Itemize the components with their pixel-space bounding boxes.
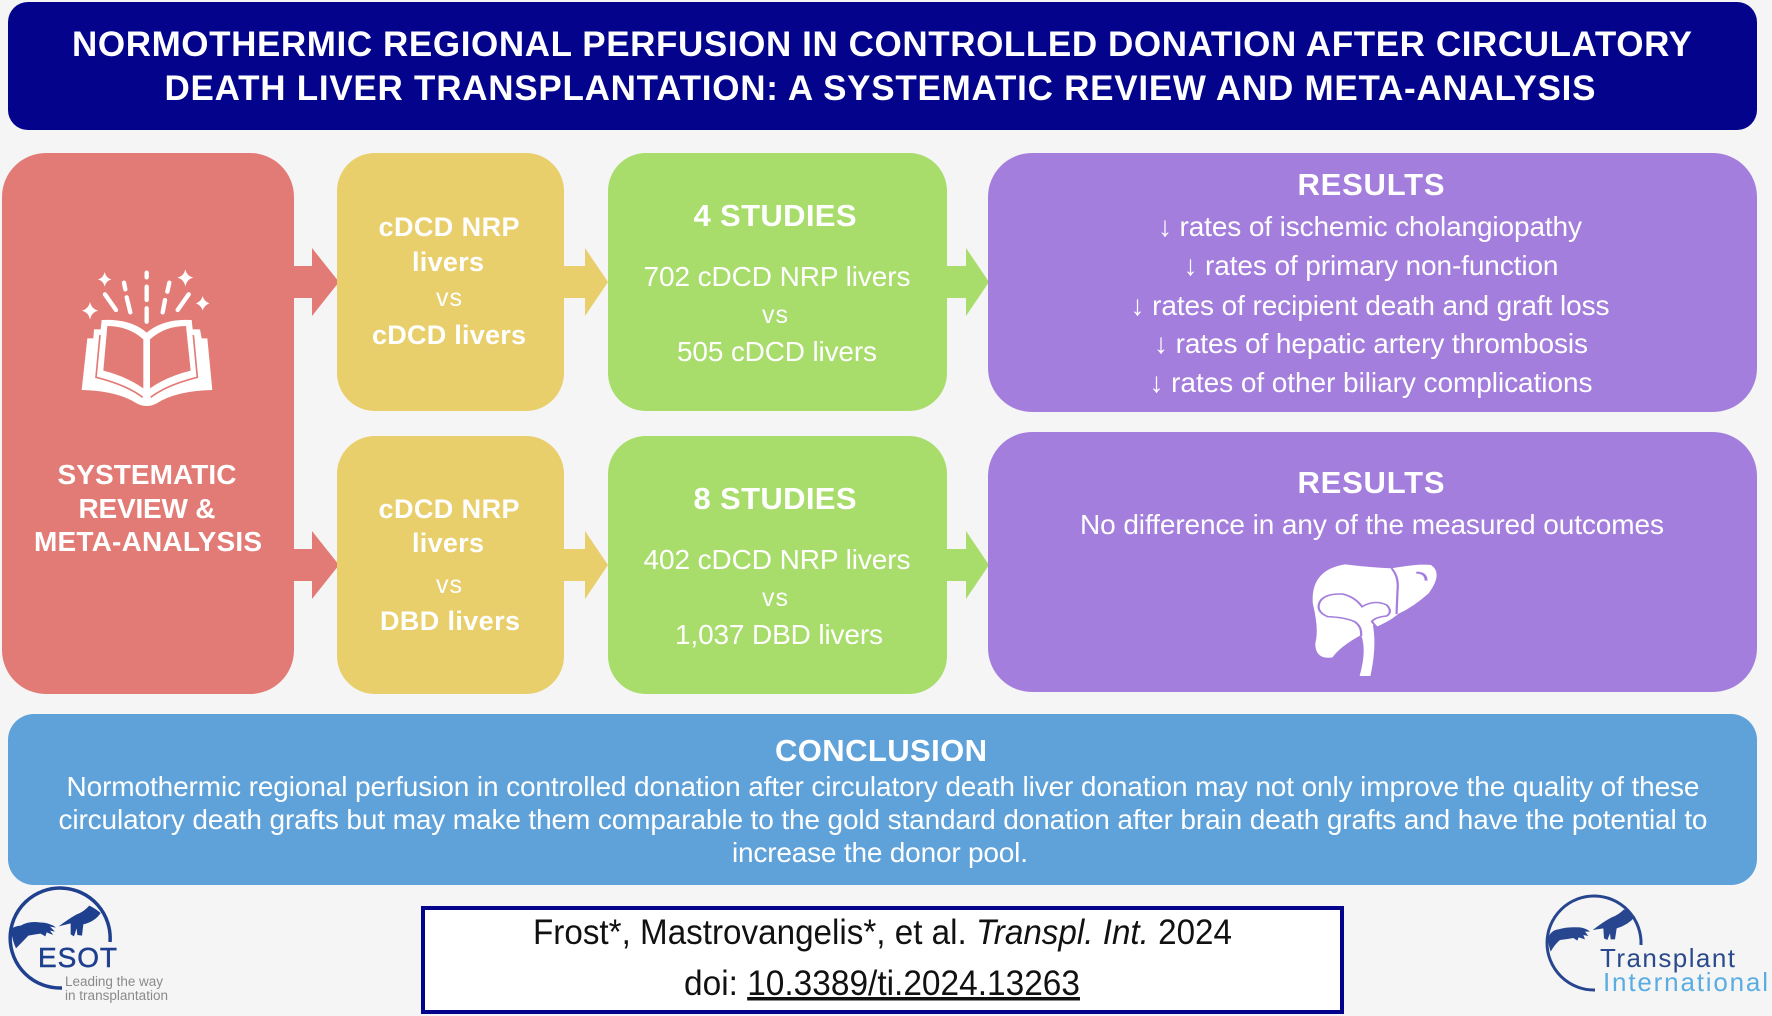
logo: Transplant International: Transplant xyxy=(1600,943,1736,973)
panel: cDCD NRP vs DBD comparison: cDCD NRP xyxy=(378,494,520,524)
title banner: DEATH LIVER TRANSPLANTATION: A SYSTEMATIC REVIEW AND META-ANALYSIS xyxy=(164,69,1596,108)
arrow: review to bottom comparison xyxy=(294,531,339,599)
arrow: bottom comparison to studies xyxy=(564,531,608,599)
panel: cDCD NRP vs cDCD comparison: vs xyxy=(436,284,462,312)
panel heading: systematic review: SYSTEMATIC xyxy=(58,459,236,490)
panel: 4 studies xyxy=(608,153,947,411)
panel heading: systematic review: REVIEW & xyxy=(78,493,216,524)
panel: results for NRP vs DBD: RESULTS xyxy=(1298,465,1444,500)
panel: results for NRP vs DBD: No difference in any of the measured outcomes xyxy=(1080,509,1664,540)
icon: open book with sparkles xyxy=(82,269,212,406)
panel: results for NRP vs cDCD xyxy=(988,153,1757,412)
panel: conclusion: circulatory death grafts but may make them comparable to the gold standard donation after brain death grafts and have the potential to xyxy=(58,804,1708,835)
panel: 4 studies: 4 STUDIES xyxy=(694,198,856,233)
panel: cDCD NRP vs DBD comparison: vs xyxy=(436,571,462,599)
panel: 4 studies: 505 cDCD livers xyxy=(677,336,877,367)
panel: systematic review and meta-analysis xyxy=(2,153,294,694)
citation box: Frost*, Mastrovangelis*, et al. Transpl. Int. 2024 xyxy=(533,913,1232,952)
title banner xyxy=(8,2,1757,130)
logo: Transplant International: International xyxy=(1603,967,1768,997)
logo: ESOT: ESOT xyxy=(38,942,117,973)
panel: 8 studies: 8 STUDIES xyxy=(694,481,856,516)
panel: 4 studies: vs xyxy=(762,301,788,329)
panel: 8 studies: 402 cDCD NRP livers xyxy=(644,544,910,575)
panel: cDCD NRP vs cDCD comparison: cDCD livers xyxy=(372,320,526,350)
panel: conclusion xyxy=(8,714,1757,885)
citation box: doi: 10.3389/ti.2024.13263 xyxy=(684,964,1080,1003)
panel: conclusion: increase the donor pool. xyxy=(732,837,1028,868)
panel: conclusion: Normothermic regional perfusion in controlled donation after circulatory death liver donation may not only improve the quality of these xyxy=(66,771,1700,802)
panel: results for NRP vs cDCD: RESULTS xyxy=(1298,167,1444,202)
panel: results for NRP vs DBD xyxy=(988,432,1757,692)
panel: cDCD NRP vs DBD comparison xyxy=(337,436,564,694)
icon: hands of the Transplant International logo xyxy=(1548,909,1635,952)
panel: 8 studies: 1,037 DBD livers xyxy=(675,619,883,650)
arrow: review to top comparison xyxy=(294,248,339,316)
results list: ↓ rates of hepatic artery thrombosis xyxy=(1154,328,1588,359)
logo: ESOT: Leading the way xyxy=(65,974,163,989)
logo: Transplant International xyxy=(1547,896,1768,997)
arrow: top comparison to studies xyxy=(564,248,608,316)
panel: 8 studies xyxy=(608,436,947,694)
logo: ESOT xyxy=(10,888,168,1003)
results list: ↓ rates of ischemic cholangiopathy xyxy=(1158,211,1582,242)
results list: ↓ rates of recipient death and graft loss xyxy=(1130,290,1610,321)
arrow: 8 studies to results xyxy=(947,531,989,599)
panel: cDCD NRP vs DBD comparison: DBD livers xyxy=(380,606,520,636)
results list xyxy=(1130,211,1610,398)
icon: liver xyxy=(1313,564,1437,676)
panel: cDCD NRP vs cDCD comparison: cDCD NRP xyxy=(378,212,520,242)
panel: cDCD NRP vs cDCD comparison: livers xyxy=(412,247,484,277)
panel: 4 studies: 702 cDCD NRP livers xyxy=(644,261,910,292)
arrow: 4 studies to results xyxy=(947,248,989,316)
results list: ↓ rates of other biliary complications xyxy=(1150,367,1592,398)
logo: ESOT: in transplantation xyxy=(65,988,168,1003)
results list: ↓ rates of primary non-function xyxy=(1184,250,1558,281)
icon: hands of the ESOT logo xyxy=(11,906,101,948)
panel: conclusion: CONCLUSION xyxy=(775,733,987,768)
citation box xyxy=(423,908,1342,1012)
panel: cDCD NRP vs cDCD comparison xyxy=(337,153,564,411)
panel: cDCD NRP vs DBD comparison: livers xyxy=(412,528,484,558)
panel: 8 studies: vs xyxy=(762,584,788,612)
panel heading: systematic review: META-ANALYSIS xyxy=(34,526,262,557)
title banner: NORMOTHERMIC REGIONAL PERFUSION IN CONTROLLED DONATION AFTER CIRCULATORY xyxy=(72,25,1692,64)
panel heading: systematic review xyxy=(34,459,262,557)
